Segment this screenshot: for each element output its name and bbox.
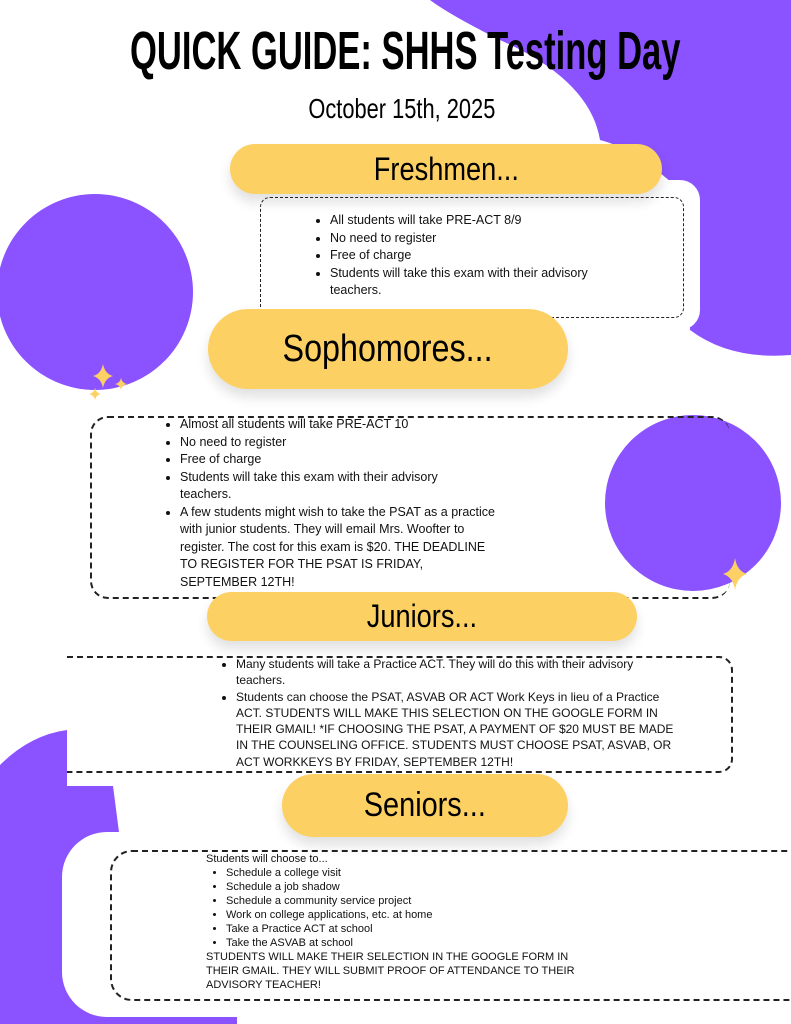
text: Freshmen list: All students will take PRE-ACT 8/9 [330, 213, 522, 227]
icon: sparkle right [723, 558, 747, 590]
text: Juniors list: Many students will take a Practice ACT. They will do this with their advisory teachers. [236, 657, 633, 687]
pill: Seniors: Seniors... [364, 786, 486, 824]
pill: Freshmen [230, 144, 662, 194]
panel: Seniors [110, 850, 791, 1001]
text: Seniors list: Work on college applications, etc. at home [226, 909, 432, 921]
title: QUICK GUIDE: SHHS Testing Day [130, 21, 680, 81]
text: Seniors list: Students will choose to... STUDENTS WILL MAKE THEIR SELECTION IN THE GOOGLE FORM IN THEIR GMAIL. THEY WILL SUBMIT PROOF OF ATTENDANCE TO THEIR ADVISORY TEACHER! [206, 853, 575, 991]
text: Sophomores list: Students will take this exam with their advisory [180, 470, 438, 484]
pill: Sophomores [208, 309, 568, 389]
text: Sophomores list [166, 417, 495, 588]
text: Seniors list: Take a Practice ACT at school [226, 923, 373, 935]
text: Sophomores list: A few students might wish to take the PSAT as a practice with junior students. They will email Mrs. Woofter to register. The cost for this exam is $20. THE DEADLINE TO REGISTER FOR THE PSAT IS FRIDAY, SEPTEMBER 12TH! [180, 504, 495, 588]
text: Seniors list: Take the ASVAB at school [226, 937, 353, 949]
text: Juniors list [222, 657, 673, 769]
panel: Juniors [67, 656, 733, 773]
pill: Seniors [282, 774, 568, 837]
text: Sophomores list: Free of charge [180, 452, 261, 466]
text: Freshmen list: Free of charge [330, 248, 411, 262]
text: Seniors list: Schedule a community service project [226, 895, 411, 907]
date: October 15th, 2025 [308, 93, 495, 124]
text: Freshmen list: Students will take this exam with their advisory teachers. [330, 266, 588, 297]
text: Sophomores list: Almost all students will take PRE-ACT 10 [180, 417, 408, 431]
panel: Freshmen [260, 197, 684, 318]
text: Freshmen list: No need to register [330, 230, 436, 244]
text: Freshmen list [316, 213, 588, 297]
text: Seniors list: Schedule a college visit [226, 867, 341, 879]
panel: Sophomores [90, 416, 730, 599]
text: Seniors list: Schedule a job shadow [226, 881, 340, 893]
text: Sophomores list: No need to register [180, 434, 286, 448]
pill: Juniors: Juniors... [367, 598, 477, 634]
text: Sophomores list: teachers. [180, 487, 231, 501]
pill: Juniors [207, 592, 637, 641]
text: Juniors list: Students can choose the PSAT, ASVAB OR ACT Work Keys in lieu of a Practice ACT. STUDENTS WILL MAKE THIS SELECTION ON THE GOOGLE FORM IN THEIR GMAIL! *IF CHOOSING THE PSAT, A PAYMENT OF $20 MUST BE MADE IN THE COUNSELING OFFICE. STUDENTS MUST CHOOSE PSAT, ASVAB, OR ACT WORKKEYS BY FRIDAY, SEPTEMBER 12TH! [236, 690, 673, 769]
pill: Sophomores: Sophomores... [283, 328, 493, 370]
pill: Freshmen: Freshmen... [373, 150, 519, 186]
icon: sparkles [89, 364, 127, 400]
